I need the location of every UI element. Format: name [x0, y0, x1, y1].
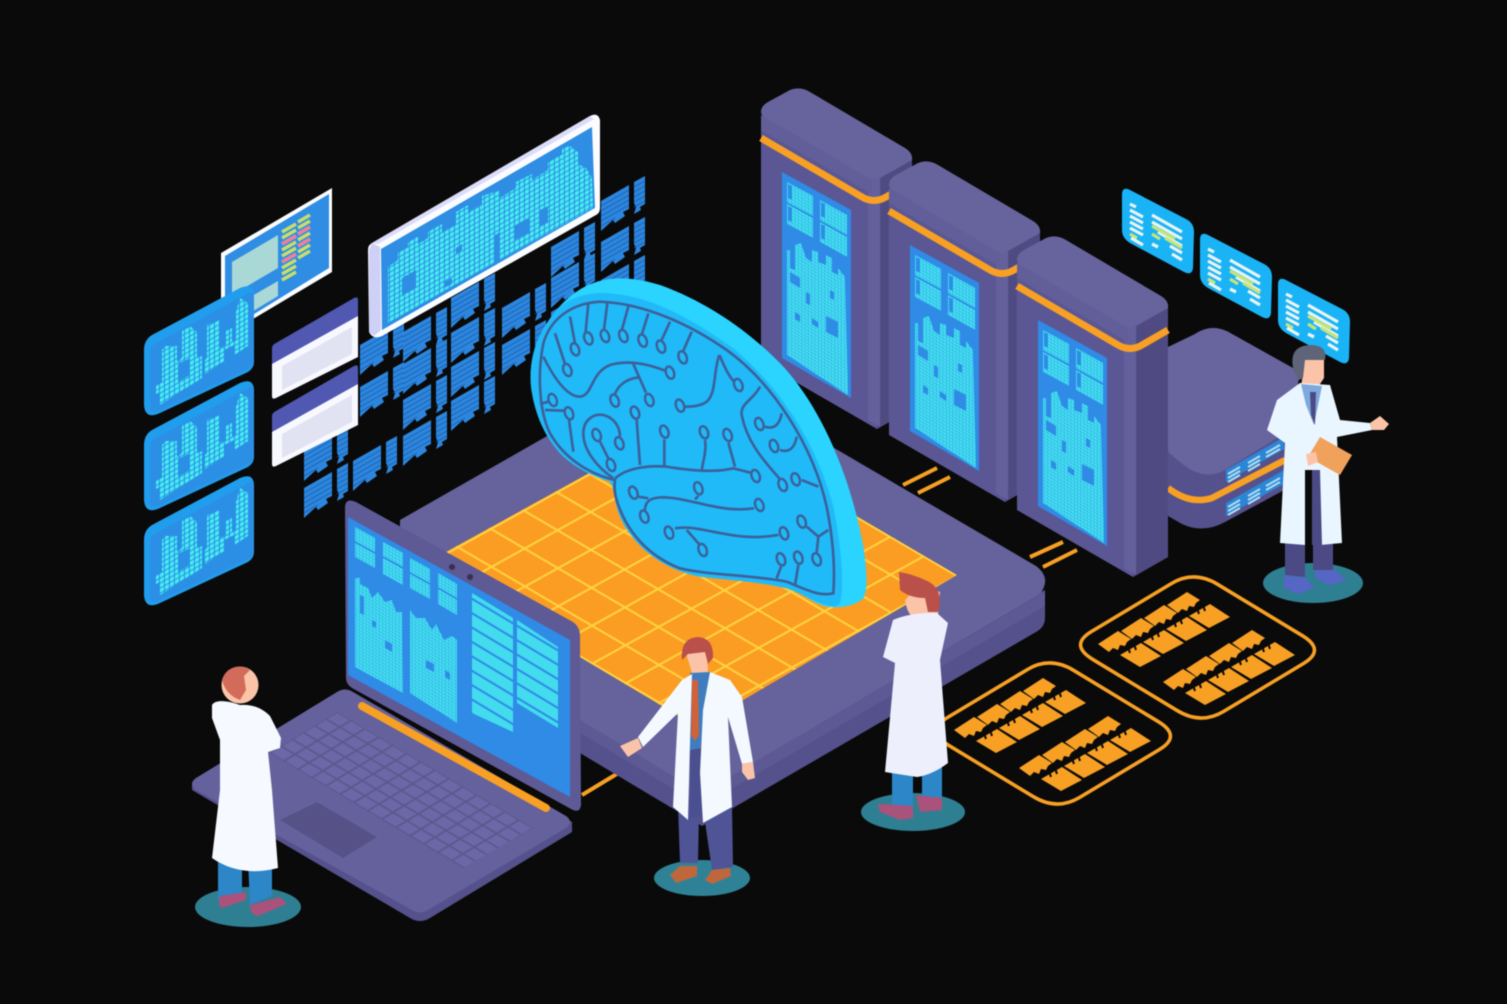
server tower 1: [761, 88, 912, 429]
brain extruded edge: [531, 278, 866, 607]
right floating panel 2: [1200, 234, 1272, 318]
person 4: scientist with clipboard: [1263, 345, 1389, 603]
white windows: stacked dialogs: [272, 297, 358, 467]
keyboard: [270, 712, 533, 868]
laptop screen frame: [345, 500, 581, 811]
person 1: back view scientist at laptop: [195, 666, 301, 927]
large wall screen: [368, 115, 600, 337]
orange hinge strip: [362, 706, 546, 808]
side panel: chart 1: [144, 286, 254, 415]
laptop screen face: [348, 517, 570, 797]
brain circuit nodes: [547, 329, 823, 567]
person 3: back view scientist by platform: [861, 572, 965, 831]
circuit board chips: [937, 577, 1314, 804]
brain: [531, 278, 866, 607]
brain face: [531, 293, 842, 607]
back-right server box: [1168, 328, 1300, 529]
webcam dots: [452, 567, 470, 577]
side panel: chart 3: [144, 476, 254, 605]
laptop deck: [192, 690, 570, 912]
right floating panel 1: [1122, 189, 1194, 273]
server tower 2: [889, 161, 1040, 502]
laptop screen data: [355, 527, 558, 732]
server tower 3: [1017, 236, 1168, 577]
orange connector cables: [582, 468, 1077, 795]
data blocks: floating code tiles: [304, 176, 645, 518]
person 2: scientist gesturing at front: [620, 637, 755, 896]
laptop: [192, 500, 581, 921]
trackpad: [280, 802, 377, 858]
small monitor with colored lists: [221, 188, 332, 338]
right floating panel 3: [1278, 279, 1350, 363]
brain circuit traces: [540, 302, 834, 594]
platform base: [400, 359, 1045, 826]
orange chip surface with grid: [424, 418, 957, 727]
side panel: chart 2: [144, 381, 254, 510]
laptop base: [192, 690, 572, 921]
